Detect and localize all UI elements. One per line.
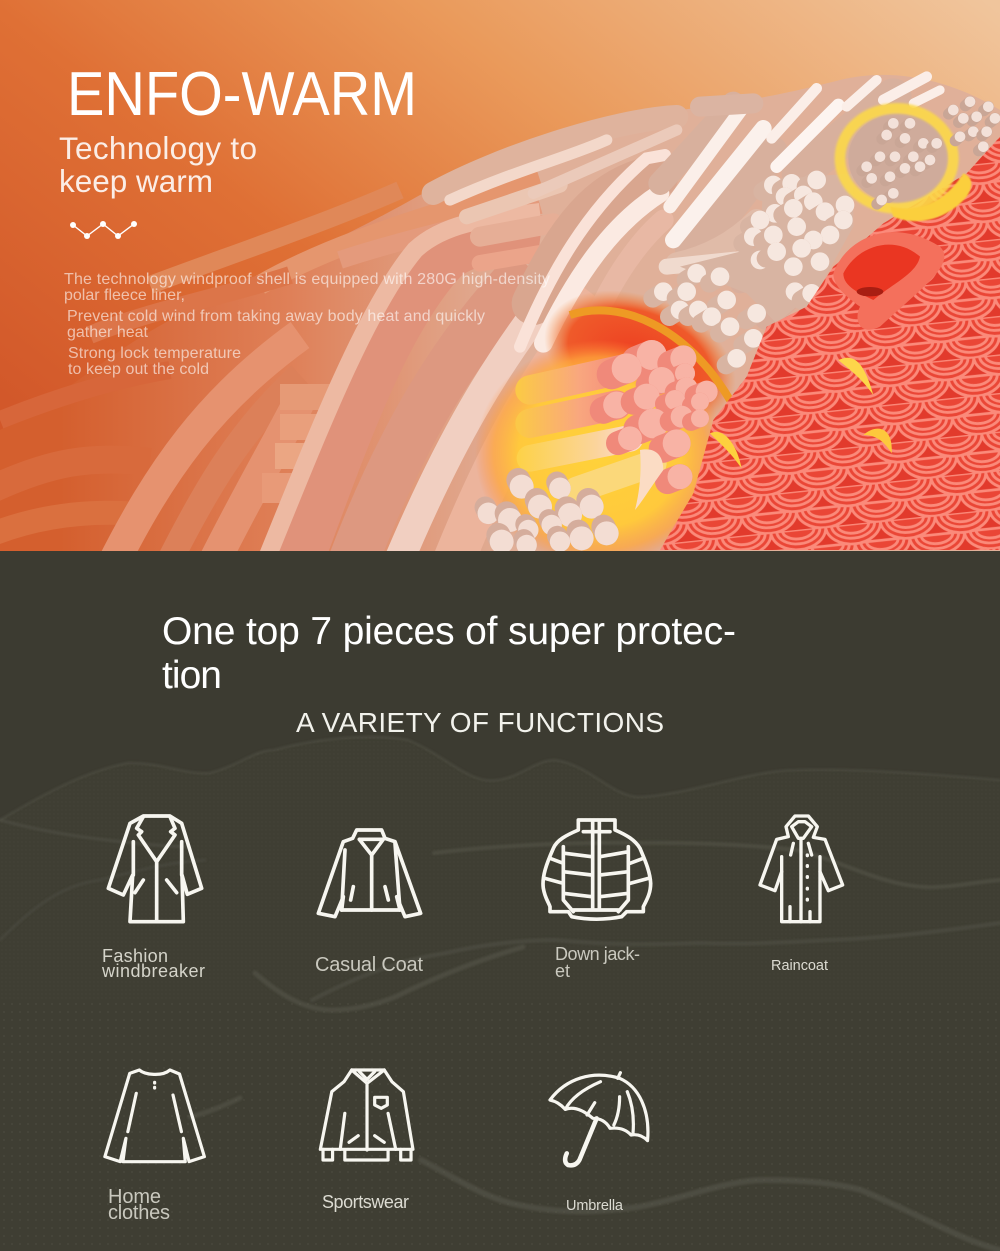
warm strands in glow: [530, 368, 653, 490]
body copy: [64, 271, 550, 378]
dark background: [0, 551, 1000, 1251]
label: [108, 1186, 170, 1224]
label: Umbrella: [566, 1198, 624, 1214]
amber rim: [570, 310, 730, 400]
flame three: [710, 432, 742, 468]
item: casual coat: [315, 830, 423, 976]
swirl dark centre: [857, 287, 883, 296]
cube pellets: [861, 118, 942, 205]
body copy: The technology windproof shell is equipped with 280G high-density: [64, 271, 550, 288]
label: [555, 944, 640, 981]
red knit layer: [660, 137, 1000, 550]
dim low-contrast strands: [0, 180, 540, 535]
heading: One top 7 pieces of super protec-: [162, 610, 736, 653]
subtitle: keep warm: [59, 163, 213, 199]
body copy: to keep out the cold: [68, 361, 209, 378]
subtitle: Technology to: [59, 130, 257, 166]
pellet cluster middle: [653, 264, 766, 368]
item: sportswear: [320, 1070, 413, 1212]
label: Home: [108, 1186, 161, 1208]
label: et: [555, 961, 570, 981]
dotted wave background: [0, 737, 1000, 1251]
pellet cluster upper: [743, 171, 854, 303]
icon: long sleeve top: [105, 1070, 204, 1162]
body copy: polar fleece liner,: [64, 287, 185, 304]
illustration: right fabric strands and pellets: [433, 77, 1000, 567]
label: clothes: [108, 1202, 170, 1224]
swirl inner: [843, 245, 920, 300]
upper band strands: [433, 77, 940, 347]
yellow heat glow: [475, 340, 725, 567]
label: windbreaker: [101, 961, 205, 981]
label: Down jack-: [555, 944, 640, 964]
panel: functions: [0, 551, 1000, 1251]
pellet backing upper: [680, 173, 853, 323]
body copy: Prevent cold wind from taking away body heat and quickly: [67, 308, 485, 325]
item: down jacket: [543, 820, 651, 981]
label: Raincoat: [771, 958, 828, 974]
icon: long coat: [108, 816, 202, 922]
label: Sportswear: [322, 1192, 409, 1212]
item: home clothes: [105, 1070, 204, 1224]
body copy: Strong lock temperature: [68, 345, 241, 362]
item: fashion windbreaker: [101, 816, 205, 981]
pellet cream end: [635, 449, 663, 510]
label: Fashion: [102, 946, 168, 966]
fabric silhouette: [0, 75, 1000, 551]
item: raincoat: [760, 816, 843, 974]
icon: bomber jacket: [320, 1070, 413, 1160]
pellet cluster bottom: [478, 475, 619, 555]
cubes inside ring: [848, 113, 948, 203]
body copy: gather heat: [67, 324, 149, 341]
diagonal ropes: [110, 212, 600, 570]
icon: zigzag dots: [70, 221, 137, 239]
item: umbrella: [550, 1073, 648, 1214]
icon: short jacket: [318, 830, 421, 917]
ring glow tail: [890, 173, 971, 221]
yellow ring: [840, 108, 953, 208]
pellets top right: [948, 96, 1000, 152]
flame two: [863, 429, 892, 453]
label: [101, 946, 205, 981]
flame one: [838, 358, 873, 395]
icon: puffer: [543, 820, 651, 919]
icon: umbrella: [550, 1073, 648, 1165]
hero background gradient: [0, 0, 1000, 551]
red swirl patch: [833, 232, 944, 330]
subheading: A VARIETY OF FUNCTIONS: [296, 707, 664, 738]
icon: raincoat: [760, 816, 843, 922]
illustration: left rope strands: [0, 180, 600, 570]
heading: [162, 610, 736, 697]
hot core disc: [524, 264, 756, 456]
label: Casual Coat: [315, 954, 423, 976]
panel: warm fabric hero: [0, 0, 1000, 570]
heading: tion: [162, 654, 222, 697]
title: ENFO-WARM: [67, 60, 417, 129]
pellet ends pink: [603, 340, 718, 489]
subtitle: [59, 130, 257, 199]
